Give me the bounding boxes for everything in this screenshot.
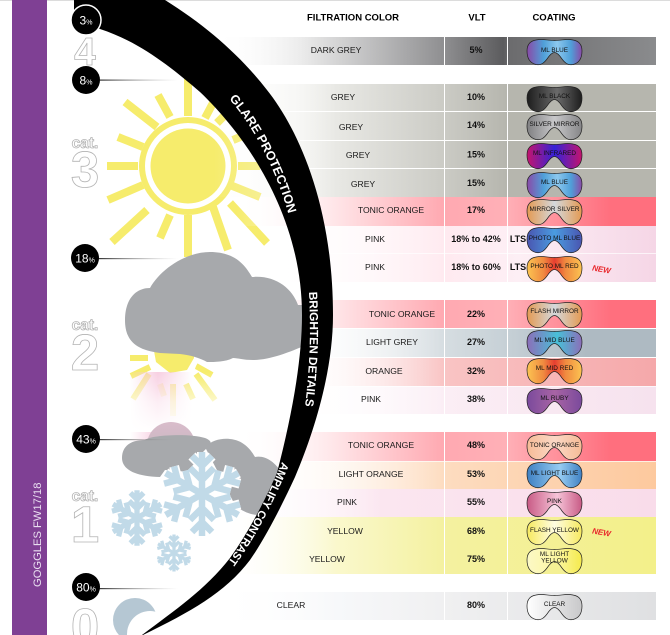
row: light orange [200,461,656,489]
row: pink 55 [200,489,656,517]
goggle: ML blue [527,172,582,198]
category 1: 1 [71,496,99,553]
goggle: clear: CLEAR [544,601,566,608]
filtration labels: PINK [361,394,381,404]
category 2: 2 [71,324,99,381]
icon: sun behind cloud [128,340,220,468]
goggle: photo ML red: PHOTO ML RED [530,263,579,270]
side bar label: GOGGLES FW17/18 [32,483,44,587]
filtration labels: GREY [346,150,370,160]
goggle: ML light yellow [527,548,582,574]
filtration labels: PINK [337,497,357,507]
goggle: ML light yellow: YELLOW [541,558,569,564]
VLT values: 15% [467,150,485,160]
goggle: ML ruby [527,388,582,414]
table rows [200,37,656,620]
goggle: ML blue: ML BLUE [541,47,568,54]
category 4: 4 [74,31,96,74]
goggle: ML light yellow: ML LIGHT [540,551,569,558]
goggle: ML black [527,86,582,112]
VLT values: 18% to 42% [451,234,501,244]
arc label: glare protection: GLARE PROTECTION [230,95,296,213]
icon: storm cloud [125,252,306,362]
filtration labels: DARK GREY [311,45,362,55]
VLT values [451,45,526,610]
goggle: ML mid blue: ML MID BLUE [534,337,575,344]
category 2: cat. [72,317,98,334]
goggle: mirror silver [527,199,582,225]
VLT values: 15% [467,178,485,188]
goggle: pink [527,491,582,517]
category numerals [71,31,99,635]
VLT values: 10% [467,92,485,102]
VLT values: 14% [467,120,485,130]
filtration labels: ORANGE [365,366,403,376]
filtration labels: PINK [365,234,385,244]
row: orange [200,357,656,386]
VLT values: 55% [467,497,485,507]
filtration labels: PINK [365,262,385,272]
icon: medium snowflake [109,490,165,546]
category 3: cat. [72,135,98,152]
row: pink 38 [200,386,656,414]
filtration labels: GREY [351,179,375,189]
goggle: ML mid red: ML MID RED [536,365,574,372]
goggle: photo ML red [527,256,582,282]
marker 80% [72,573,178,601]
goggle: flash mirror: FLASH MIRROR [530,308,579,315]
icon: snow cloud [109,435,281,571]
marker 3% [71,5,101,35]
header: VLT: VLT [468,12,486,24]
marker 80%: 80% [76,580,96,594]
category 1: cat. [72,488,98,505]
icon: large snowflake [160,452,244,536]
goggle: photo ML blue: PHOTO ML BLUE [529,235,580,242]
arc label: brighten details: BRIGHTEN DETAILS [305,292,318,406]
new badge: NEW [591,526,613,539]
VLT values: 38% [467,394,485,404]
row: light grey [200,328,656,357]
LTS tag: LTS [510,234,526,244]
goggle: ML blue: ML BLUE [541,179,568,186]
VLT markers [71,5,178,601]
goggle: tonic orange: TONIC ORANGE [530,442,579,449]
filtration labels: YELLOW [327,526,364,536]
new badge: NEW [591,263,613,276]
filtration labels: TONIC ORANGE [348,440,414,450]
rows: pink LTS [200,226,656,282]
arc label: amplify contrast: AMPLIFY CONTRAST [230,462,288,566]
marker 8%: 8% [80,74,92,88]
marker 43%: 43% [76,432,96,446]
marker 3%: 3% [80,14,92,28]
row: clear [200,592,656,620]
goggle: ML black: ML BLACK [539,93,571,100]
purple side bar [12,0,47,635]
marker 18% [71,244,178,272]
row: dark grey [200,37,656,65]
goggle: ML light blue: ML LIGHT BLUE [531,470,578,477]
marker 43% [72,425,178,453]
VLT values: 48% [467,440,485,450]
goggle: tonic orange [527,434,582,460]
row: tonic orange 17 [200,197,656,226]
goggle: clear [527,594,582,620]
goggle: ML infrared: ML INFRARED [533,150,576,157]
filtration labels: LIGHT ORANGE [339,469,404,479]
VLT values: 27% [467,337,485,347]
goggle: silver mirror: SILVER MIRROR [530,121,580,128]
LTS tag: LTS [510,262,526,272]
goggle coatings [527,39,613,620]
VLT values: 53% [467,469,485,479]
VLT values: 75% [467,554,485,564]
goggle: ML ruby: ML RUBY [540,395,569,402]
filtration labels: CLEAR [277,600,305,610]
goggle: photo ML blue [527,227,582,253]
header: filtration color: FILTRATION COLOR [307,12,399,24]
filtration labels: GREY [331,92,355,102]
rows: yellow [200,517,656,574]
column headers [307,12,576,24]
category 3: 3 [71,141,99,198]
goggle: flash yellow: FLASH YELLOW [530,527,580,534]
icon: sun [107,77,267,257]
marker 8% [72,66,178,94]
icon: moon [113,598,173,635]
goggle: pink: PINK [547,498,563,505]
VLT values: 18% to 60% [451,262,501,272]
goggle: ML blue [527,39,582,65]
goggle: ML infrared [527,143,582,169]
VLT values: 22% [467,309,485,319]
filtration labels: LIGHT GREY [366,337,418,347]
header: coating: COATING [532,12,576,24]
icon: small snowflake [155,535,193,571]
rows: grey [200,84,656,197]
top edge line [0,0,670,1]
filtration labels: TONIC ORANGE [358,205,424,215]
goggle: flash yellow [527,519,582,545]
goggle: ML light blue [527,462,582,488]
black arc [74,0,333,635]
VLT values: 32% [467,366,485,376]
filtration labels: GREY [339,122,363,132]
marker 18%: 18% [75,252,95,266]
filtration labels [277,45,435,610]
VLT values: 80% [467,600,485,610]
VLT values: 68% [467,526,485,536]
VLT values: 17% [467,205,485,215]
goggle: silver mirror [527,114,582,140]
VLT values: 5% [469,45,483,55]
filtration labels: TONIC ORANGE [369,309,435,319]
row: tonic orange 48 [200,432,656,461]
filtration labels: YELLOW [309,554,346,564]
goggle: ML mid red [527,358,582,384]
goggle: mirror silver: MIRROR SILVER [530,206,580,213]
goggle: ML mid blue [527,330,582,356]
row: tonic orange 22 [200,300,656,328]
goggle: flash mirror [527,302,582,328]
